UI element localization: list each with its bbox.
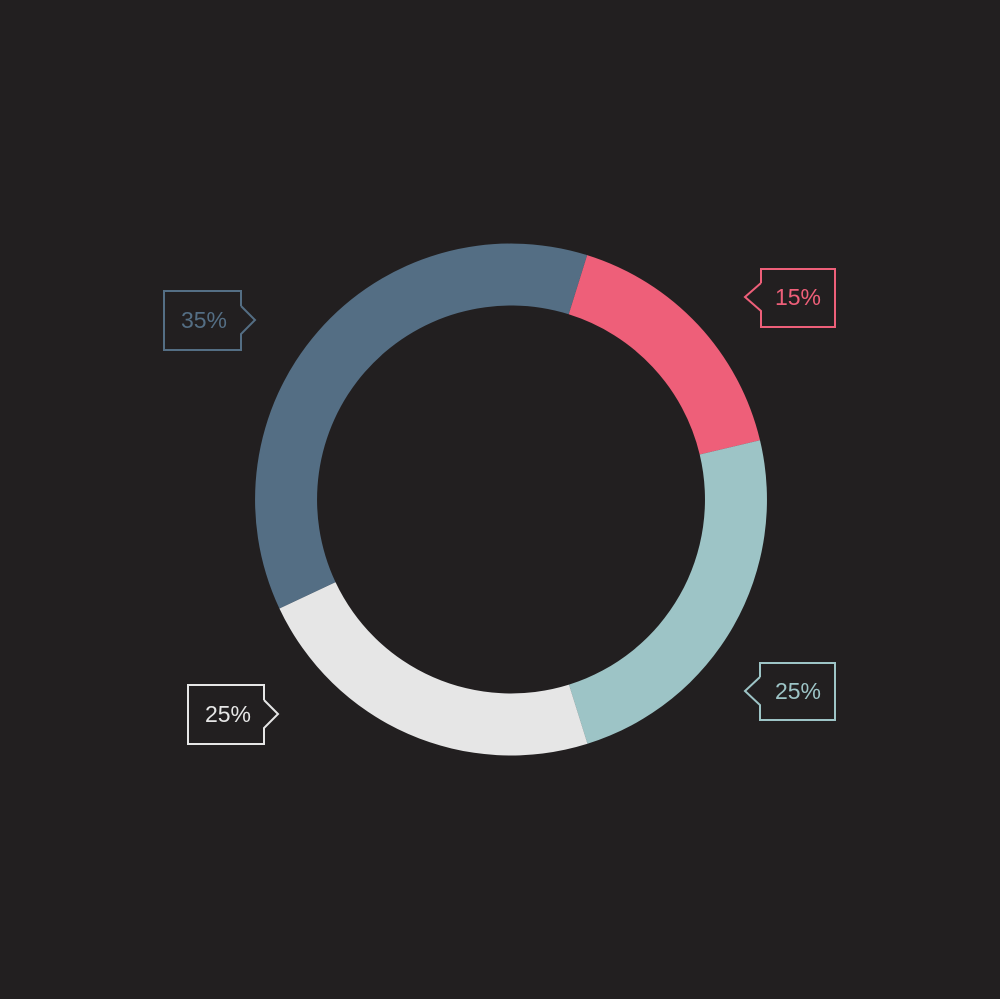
callout: 25% white [188,685,278,744]
callout: 25% teal [745,663,835,720]
donut chart [255,244,767,755]
segment: red 15% [569,255,760,454]
callout: 35% blue: 35% [181,307,227,333]
callout: 25% teal: 25% [775,678,821,704]
segment: teal 25% [569,440,767,744]
callout: 15% red [745,269,835,327]
callout: 15% red: 15% [775,284,821,310]
callout: 35% blue [164,291,255,350]
callout: 25% white: 25% [205,701,251,727]
segment: blue 35% [255,244,587,608]
segment: white 25% [279,582,588,755]
